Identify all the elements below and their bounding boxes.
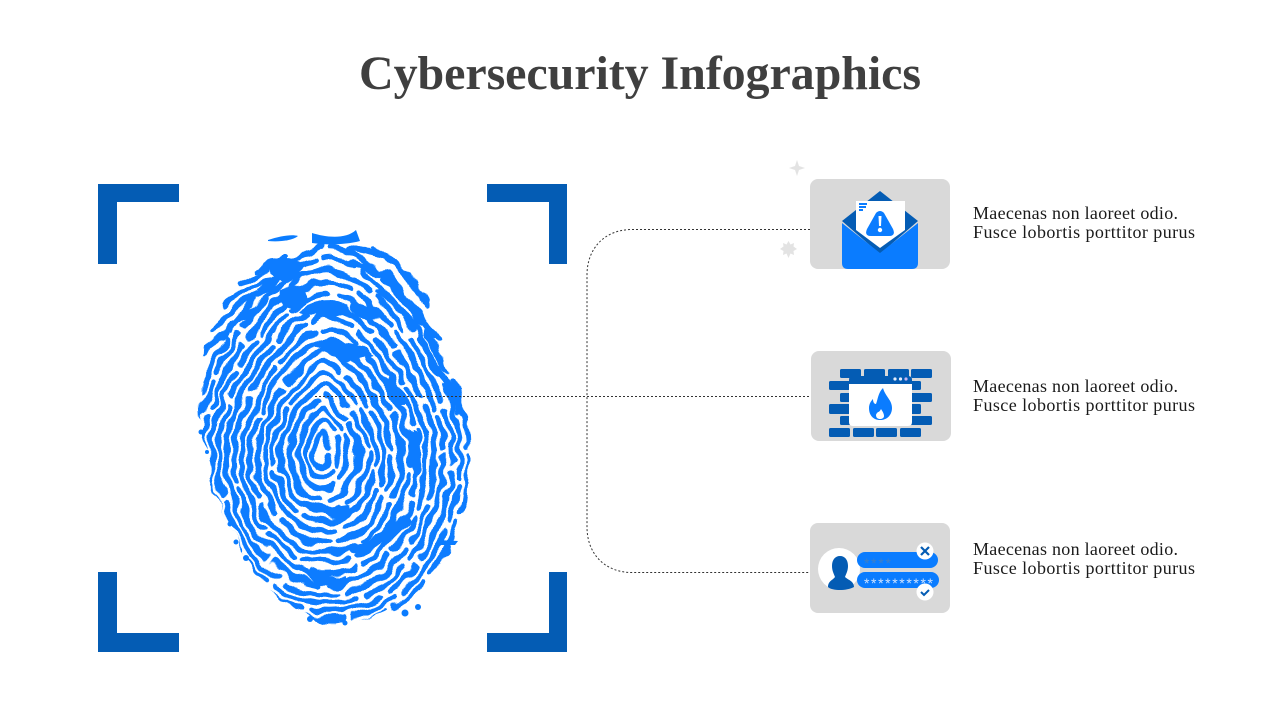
icon: brick wall <box>829 369 932 437</box>
icon: user avatar <box>818 548 860 590</box>
icon: password fields: ********** <box>864 575 934 591</box>
connector lines <box>315 230 811 572</box>
text: firewall <box>973 376 1195 415</box>
icon: password fields <box>857 542 939 600</box>
text: firewall: Fusce lobortis porttitor purus <box>973 395 1195 415</box>
fingerprint tangled ridge blobs <box>262 255 421 584</box>
fingerprint <box>186 230 469 628</box>
panel: email alert <box>810 179 950 269</box>
text: login credentials: Maecenas non laoreet odio. <box>973 539 1178 559</box>
text: login credentials: Fusce lobortis porttitor purus <box>973 558 1195 578</box>
text: email alert: Maecenas non laoreet odio. <box>973 203 1178 223</box>
text: firewall: Maecenas non laoreet odio. <box>973 376 1178 396</box>
fingerprint shoulder ridges <box>204 248 458 408</box>
fingerprint scan frame <box>98 184 567 652</box>
icon: password fields: **** <box>864 555 892 571</box>
text: email alert <box>973 203 1195 242</box>
panel: firewall <box>811 351 951 441</box>
title: Cybersecurity Infographics <box>359 47 921 100</box>
panel: login credentials <box>810 523 950 613</box>
text: login credentials <box>973 539 1195 578</box>
fingerprint crisp outer fragments <box>198 230 458 626</box>
text: email alert: Fusce lobortis porttitor purus <box>973 222 1195 242</box>
decorative sparkles <box>780 160 805 258</box>
icon: envelope with warning <box>842 191 918 269</box>
icon: browser window with flame <box>849 376 912 426</box>
